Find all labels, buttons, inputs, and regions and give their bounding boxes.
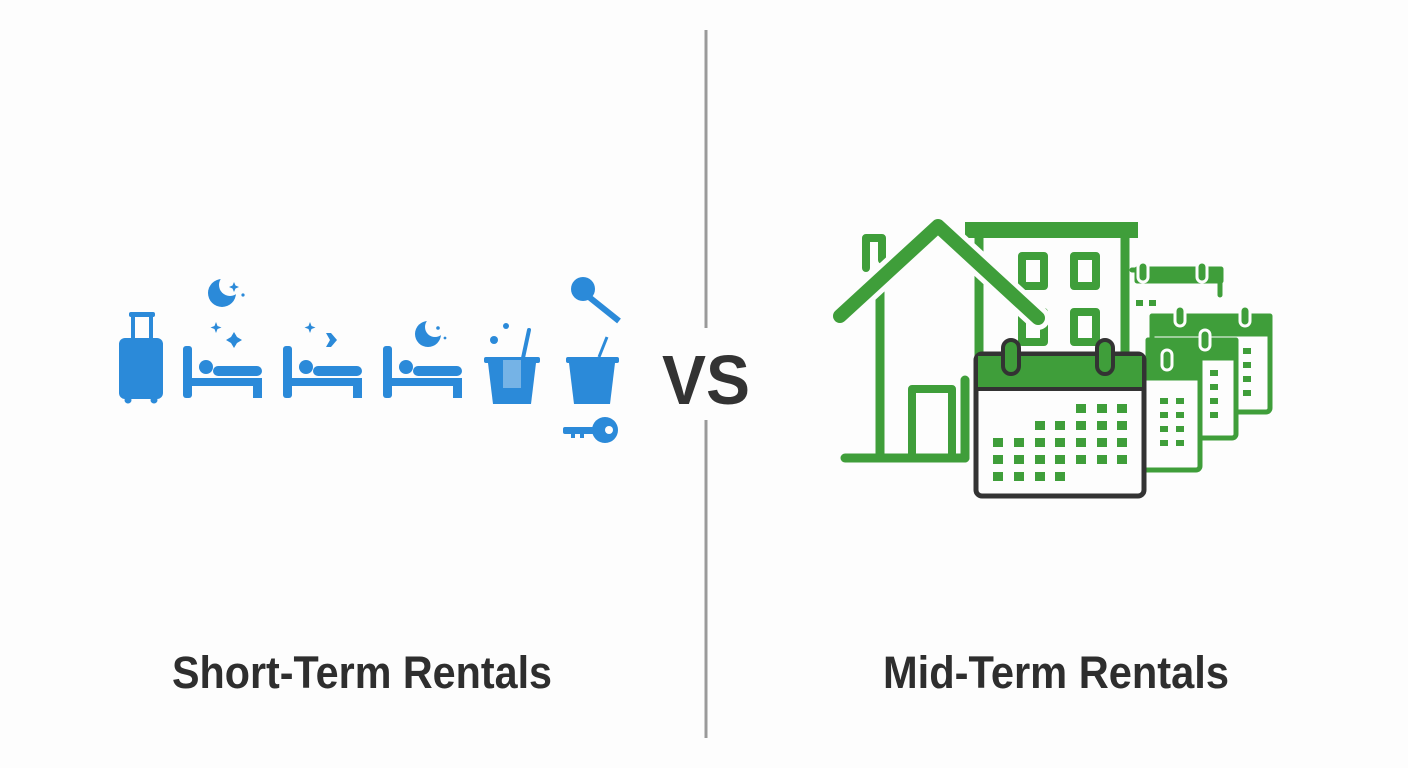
icon: house — [840, 226, 1038, 458]
vs label: VS — [662, 341, 750, 419]
icon: moon 1 — [208, 274, 245, 307]
icon: main calendar — [976, 340, 1144, 496]
icon: bed 1 — [183, 322, 262, 398]
icon: bucket with cloth — [484, 323, 540, 404]
icon: bed 2 — [283, 322, 362, 398]
icon: suitcase — [119, 312, 163, 404]
icon: apartment building — [965, 222, 1138, 358]
title: short-term rentals: Short-Term Rentals — [172, 647, 552, 698]
icon: bed 3 with moon — [383, 317, 462, 398]
mid-term icon group — [840, 222, 1270, 496]
icon: stacked calendars — [1132, 262, 1270, 470]
short-term icon row — [119, 274, 619, 443]
icon: bucket with keys — [563, 277, 619, 443]
title: mid-term rentals: Mid-Term Rentals — [883, 647, 1229, 698]
